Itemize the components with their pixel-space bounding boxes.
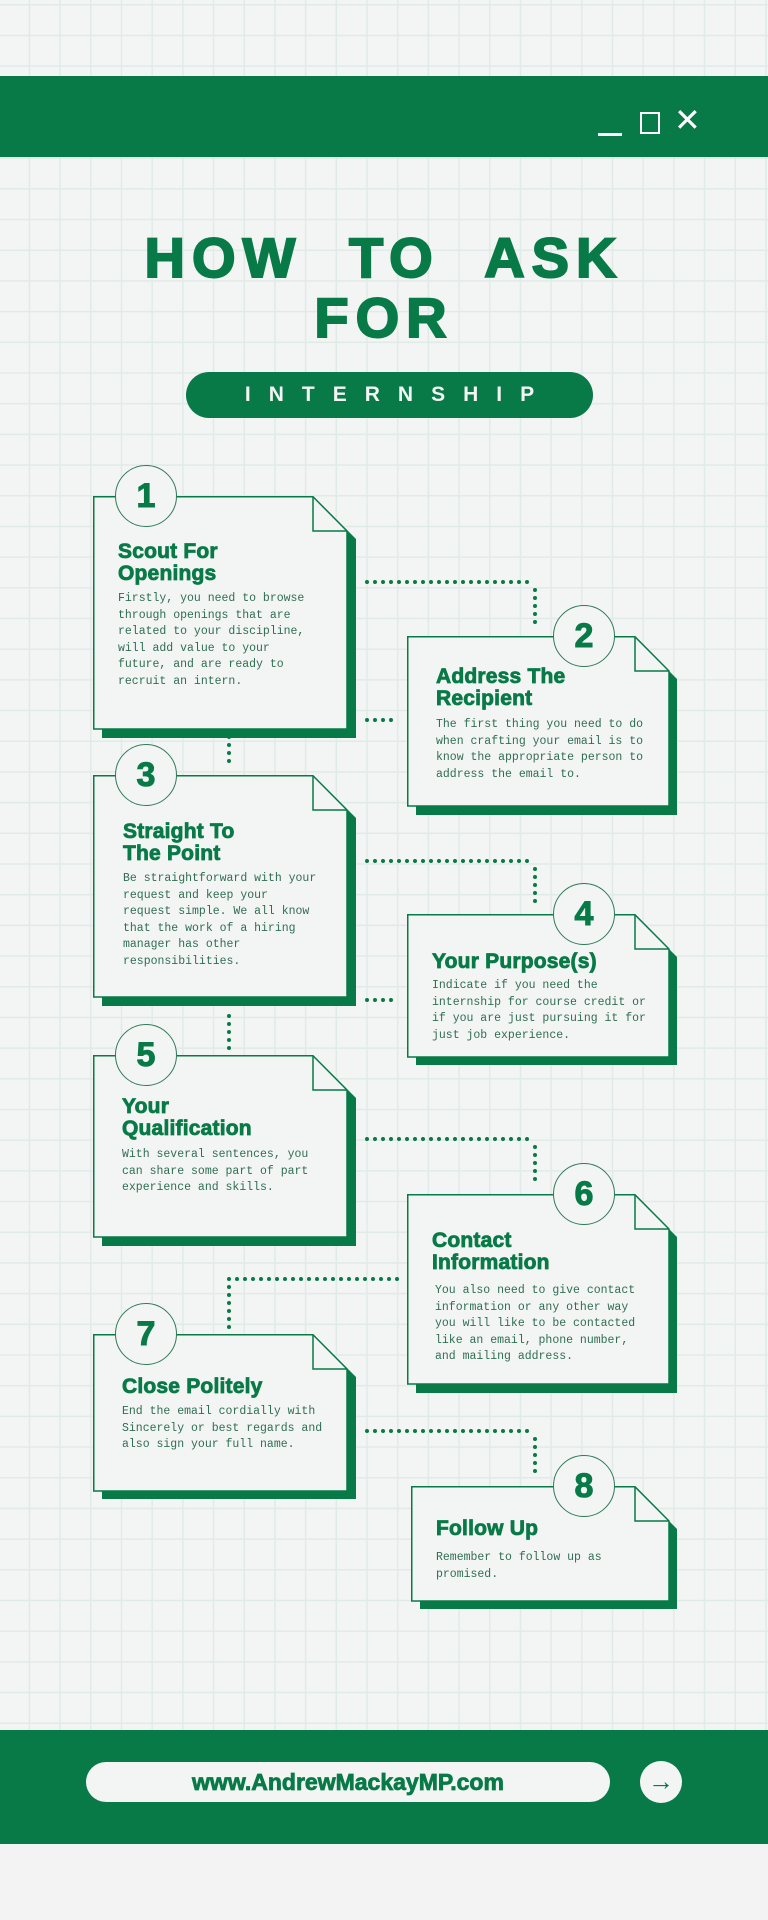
website pill: www.AndrewMackayMP.com — [192, 1769, 504, 1795]
panel: step 6: you will like to be contacted — [435, 1317, 635, 1330]
panel: step 3: manager has other — [123, 938, 240, 951]
panel: step 4: just job experience. — [432, 1029, 570, 1042]
panel: step 8 — [411, 1455, 677, 1609]
panel: step 2: address the email to. — [436, 768, 581, 781]
panel: step 4: internship for course credit or — [432, 996, 646, 1009]
panel: step 3: request and keep your — [123, 889, 268, 902]
panel: step 3: Straight To — [123, 820, 234, 843]
panel: step 3: The Point — [123, 842, 220, 865]
panel: step 6: like an email, phone number, — [435, 1334, 628, 1347]
panel: step 6: Information — [432, 1251, 550, 1274]
panel: step 5: 5 — [137, 1036, 155, 1074]
panel: step 1: Scout For — [118, 540, 218, 563]
panel: step 6: 6 — [575, 1175, 593, 1213]
panel: step 3 — [93, 744, 356, 1006]
title: FOR — [314, 286, 454, 349]
panel: step 3: that the work of a hiring — [123, 922, 296, 935]
website pill — [86, 1762, 610, 1802]
panel: step 1: Openings — [118, 562, 216, 585]
panel: step 3: request simple. We all know — [123, 905, 309, 918]
icon: window controls — [598, 102, 701, 138]
panel: step 1: Firstly, you need to browse — [118, 592, 304, 605]
panel: step 5: With several sentences, you — [122, 1148, 308, 1161]
panel: step 8: Follow Up — [436, 1517, 538, 1540]
panel: step 1: future, and are ready to — [118, 658, 284, 671]
panel: step 4: 4 — [575, 895, 593, 933]
panel: step 8: promised. — [436, 1568, 498, 1581]
panel: step 6: Contact — [432, 1229, 512, 1252]
panel: step 2: Address The — [436, 665, 565, 688]
panel: step 5: can share some part of part — [122, 1165, 308, 1178]
panel: step 1: will add value to your — [118, 642, 270, 655]
panel: step 5: Qualification — [122, 1117, 252, 1140]
panel: step 1: related to your discipline, — [118, 625, 304, 638]
top window bar — [0, 76, 768, 157]
panel: step 2: Recipient — [436, 687, 532, 710]
panel: step 1: recruit an intern. — [118, 675, 242, 688]
panel: step 8: Remember to follow up as — [436, 1551, 602, 1564]
panel: step 6: and mailing address. — [435, 1350, 573, 1363]
panel: step 3: responsibilities. — [123, 955, 240, 968]
panel: step 1: through openings that are — [118, 609, 291, 622]
subtitle pill — [186, 372, 593, 418]
panel: step 4 — [407, 883, 677, 1065]
title: HOW TO ASK — [145, 226, 623, 289]
icon: arrow — [640, 1761, 682, 1803]
panel: step 3: Be straightforward with your — [123, 872, 316, 885]
panel: step 3: 3 — [137, 756, 155, 794]
panel: step 5: Your — [122, 1095, 169, 1118]
panel: step 2: 2 — [575, 617, 593, 655]
panel: step 2: when crafting your email is to — [436, 735, 643, 748]
panel: step 7: 7 — [137, 1315, 155, 1353]
panel: step 6: information or any other way — [435, 1301, 628, 1314]
panel: step 2: know the appropriate person to — [436, 751, 643, 764]
panel: step 7: Close Politely — [122, 1375, 263, 1398]
panel: step 5: experience and skills. — [122, 1181, 274, 1194]
panel: step 1: 1 — [137, 477, 155, 515]
panel: step 1 — [93, 465, 356, 738]
panel: step 4: Your Purpose(s) — [432, 950, 597, 973]
icon: arrow: → — [648, 1766, 674, 1796]
panel: step 7 — [93, 1303, 356, 1499]
panel: step 4: Indicate if you need the — [432, 979, 598, 992]
panel: step 8: 8 — [575, 1467, 593, 1505]
footer band — [0, 1730, 768, 1844]
panel: step 7: End the email cordially with — [122, 1405, 315, 1418]
icon: window controls: ✕ — [674, 102, 701, 138]
panel: step 4: if you are just pursuing it for — [432, 1012, 646, 1025]
title — [145, 226, 623, 349]
panel: step 6 — [407, 1163, 677, 1393]
panel: step 6: You also need to give contact — [435, 1284, 635, 1297]
panel: step 7: Sincerely or best regards and — [122, 1422, 322, 1435]
panel: step 2: The first thing you need to do — [436, 718, 643, 731]
subtitle pill: INTERNSHIP — [245, 383, 552, 406]
panel: step 7: also sign your full name. — [122, 1438, 295, 1451]
panel: step 2 — [407, 605, 677, 815]
panel: step 5 — [93, 1024, 356, 1246]
